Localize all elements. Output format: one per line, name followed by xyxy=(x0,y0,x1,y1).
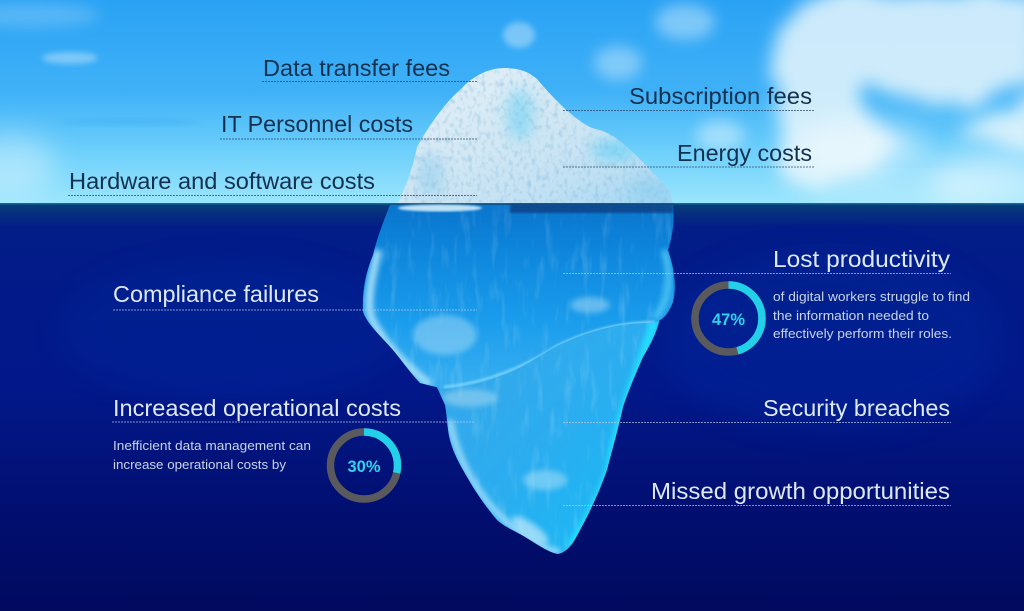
text: operational costs description xyxy=(113,438,311,472)
label: Compliance failures: Compliance failures xyxy=(113,281,319,307)
iceberg: tip above water xyxy=(395,65,675,205)
donut chart: 47% xyxy=(695,285,762,352)
label: Energy costs: Energy costs xyxy=(677,140,812,166)
label: Missed growth opportunities: Missed growth opportunities xyxy=(651,478,950,504)
text: lost productivity description: the information needed to xyxy=(773,308,929,323)
label: Subscription fees: Subscription fees xyxy=(629,83,812,109)
iceberg: waterline foam xyxy=(398,204,673,213)
clouds xyxy=(0,0,1024,208)
donut chart: 30%: 30% xyxy=(348,458,381,476)
text: lost productivity description xyxy=(773,289,970,341)
text: operational costs description: Inefficient data management can xyxy=(113,438,311,453)
donut chart: 30% xyxy=(330,432,398,499)
iceberg: submerged upper part xyxy=(355,203,680,398)
label: Lost productivity: Lost productivity xyxy=(773,246,951,272)
label: Security breaches: Security breaches xyxy=(763,395,950,421)
background: sky xyxy=(0,0,1024,208)
background: deep sea xyxy=(0,203,1024,611)
label: Hardware and software costs: Hardware and software costs xyxy=(69,168,375,194)
donut chart: 47%: 47% xyxy=(712,311,745,329)
iceberg: submerged lower part xyxy=(437,320,660,554)
text: lost productivity description: effectively perform their roles. xyxy=(773,326,952,341)
label: IT Personnel costs: IT Personnel costs xyxy=(221,111,413,137)
iceberg xyxy=(355,65,680,560)
text: operational costs description: increase operational costs by xyxy=(113,457,287,472)
label: Data transfer fees: Data transfer fees xyxy=(263,55,450,81)
text: lost productivity description: of digital workers struggle to find xyxy=(773,289,970,304)
label: Increased operational costs: Increased operational costs xyxy=(113,395,401,421)
